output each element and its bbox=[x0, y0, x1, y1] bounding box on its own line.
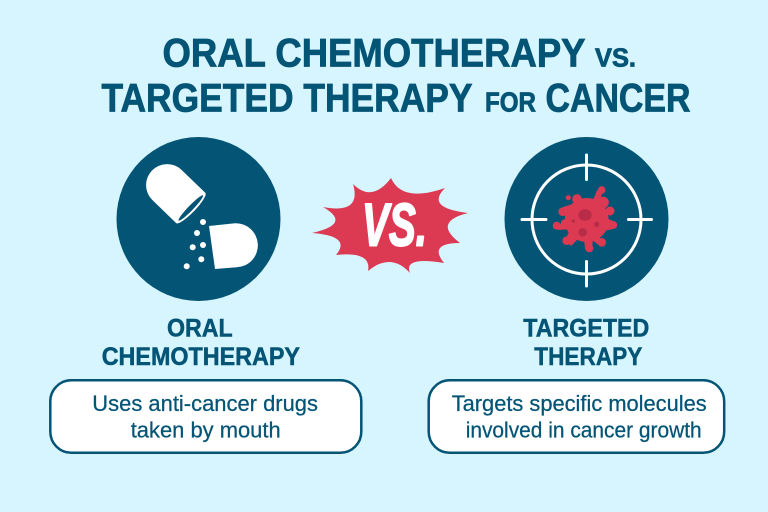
heading: oral chemotherapy: ORAL bbox=[167, 315, 233, 343]
capsule upper half bbox=[137, 155, 209, 226]
title bbox=[102, 32, 691, 120]
panel: targeted therapy description: involved in cancer growth bbox=[466, 417, 702, 442]
virus bbox=[553, 186, 617, 252]
heading: targeted therapy bbox=[523, 315, 649, 371]
title: ORAL CHEMOTHERAPY bbox=[162, 32, 586, 76]
panel: oral chemotherapy description: taken by mouth bbox=[131, 417, 281, 442]
versus burst badge: VS. bbox=[362, 192, 427, 258]
virus spots bbox=[572, 209, 599, 237]
heading: targeted therapy: THERAPY bbox=[534, 343, 643, 371]
panel: targeted therapy description: Targets specific molecules bbox=[452, 391, 707, 416]
icon: crosshair on virus bbox=[504, 137, 668, 301]
crosshair bbox=[522, 155, 652, 286]
panel: targeted therapy description bbox=[429, 380, 724, 453]
versus burst badge bbox=[312, 178, 468, 273]
title: FOR bbox=[485, 86, 536, 118]
heading: oral chemotherapy: CHEMOTHERAPY bbox=[102, 343, 300, 371]
panel: oral chemotherapy description: Uses anti-cancer drugs bbox=[92, 391, 318, 416]
heading: targeted therapy: TARGETED bbox=[523, 315, 649, 343]
title: CANCER bbox=[546, 76, 691, 120]
title: TARGETED THERAPY bbox=[102, 76, 473, 120]
powder dots bbox=[184, 219, 206, 269]
icon: opening capsule with powder bbox=[116, 137, 280, 301]
title: VS. bbox=[595, 42, 636, 72]
capsule lower half bbox=[209, 223, 258, 269]
panel: oral chemotherapy description bbox=[50, 380, 361, 453]
heading: oral chemotherapy bbox=[102, 315, 300, 371]
